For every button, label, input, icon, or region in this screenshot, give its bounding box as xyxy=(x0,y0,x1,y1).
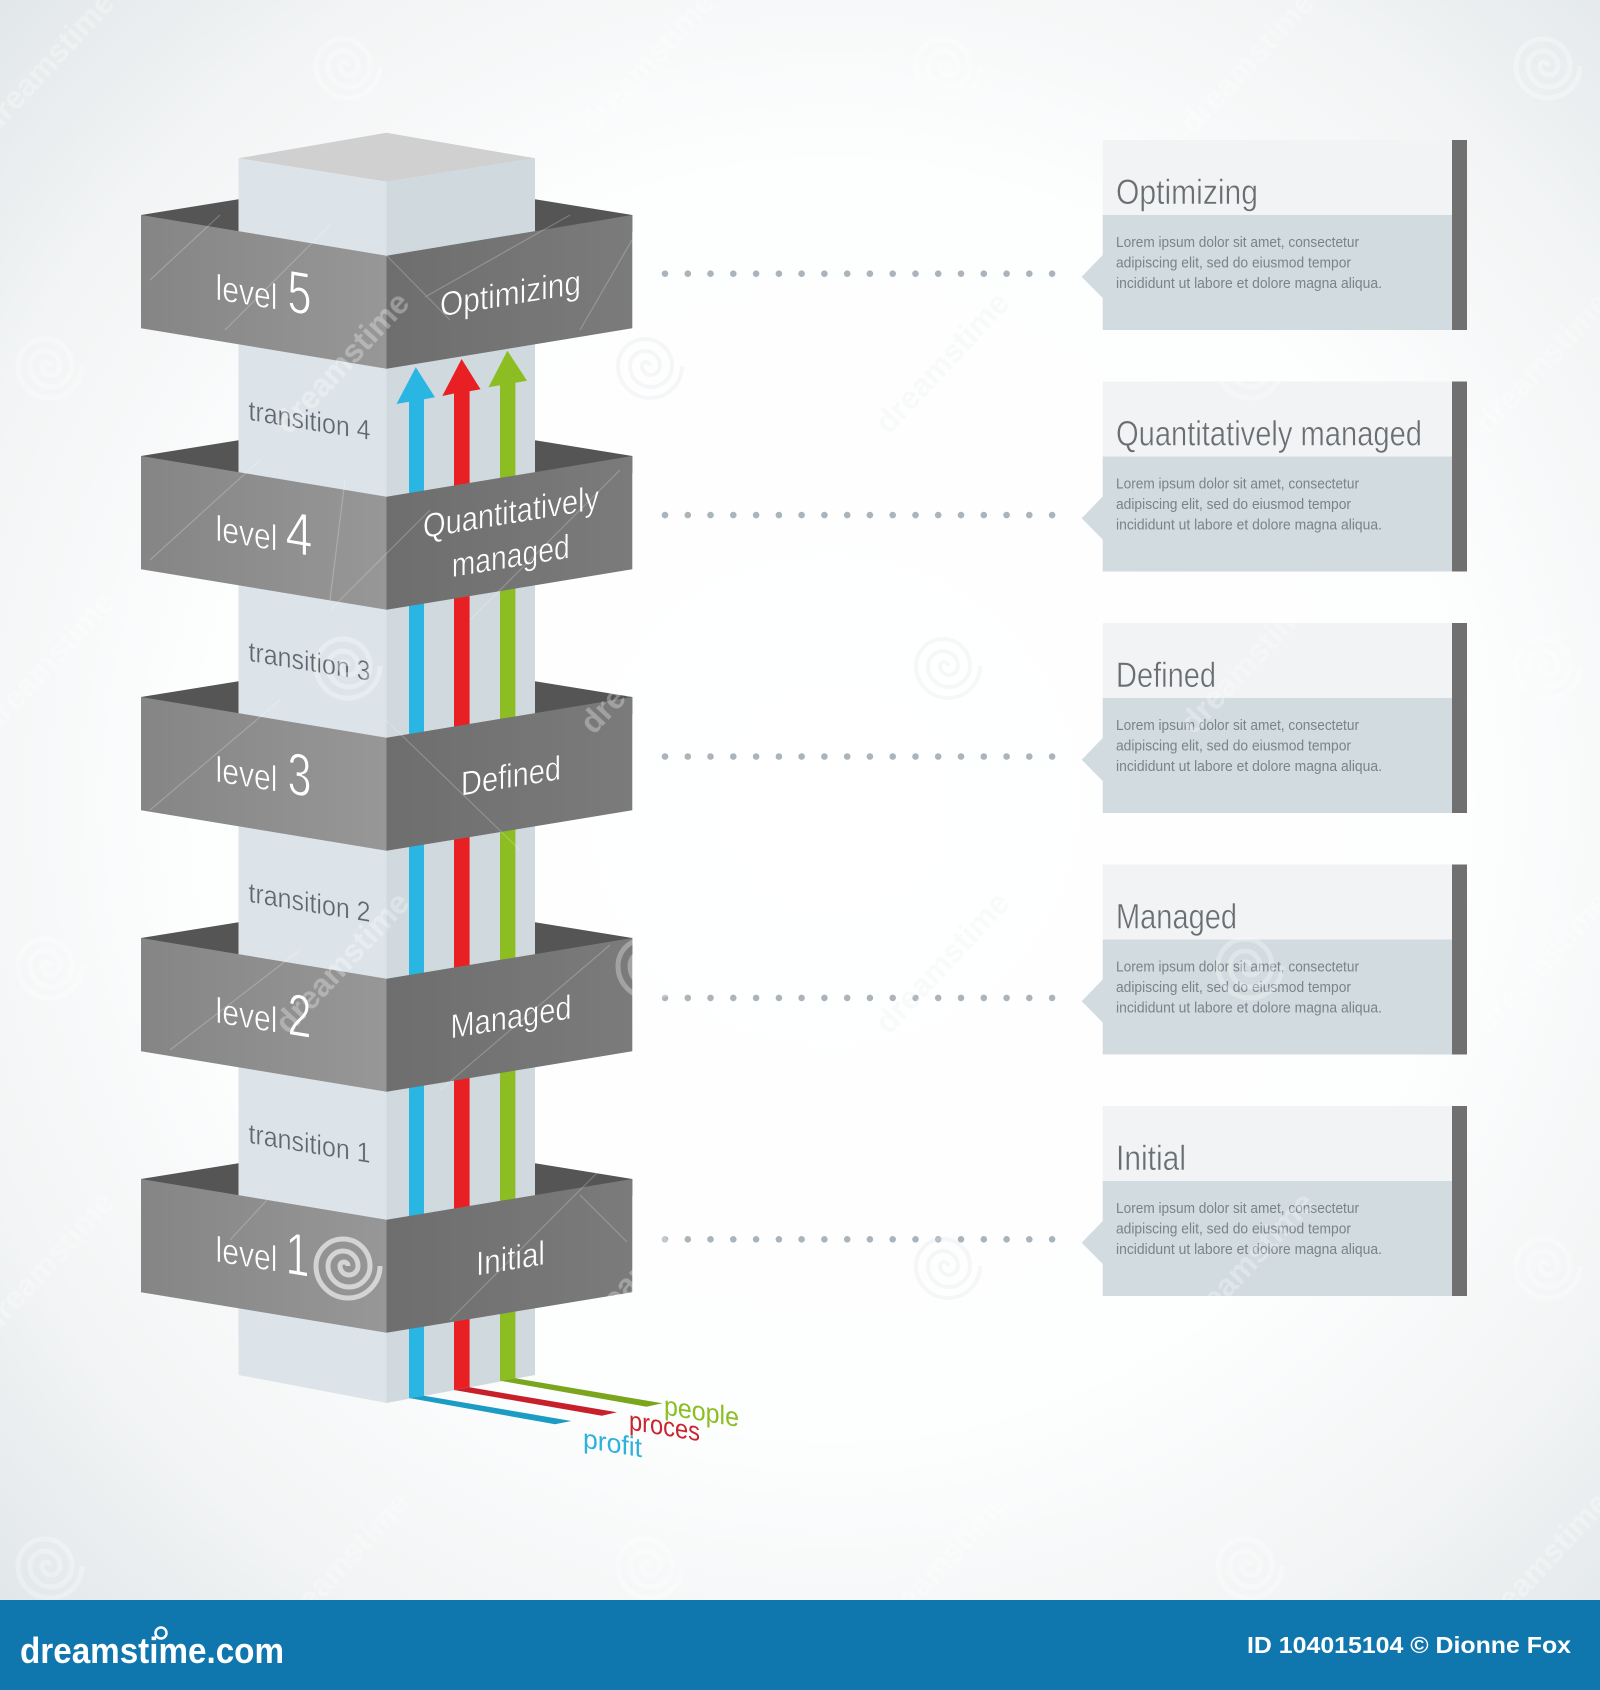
card: Optimizing xyxy=(1082,140,1467,330)
watermark text: dreamstime xyxy=(868,885,1016,1040)
card: Quantitatively managed: incididunt ut labore et dolore magna aliqua. xyxy=(1116,516,1382,534)
footer logo spiral xyxy=(156,1628,166,1638)
card: Managed: adipiscing elit, sed do eiusmod tempor xyxy=(1116,979,1351,996)
card: Initial: Lorem ipsum dolor sit amet, consectetur xyxy=(1116,1200,1359,1217)
arrow: process xyxy=(442,359,480,1390)
band: level 1 Initial: Initial xyxy=(476,1234,545,1284)
legend: profit: profit xyxy=(583,1423,642,1463)
card: Managed: Managed xyxy=(1116,898,1237,936)
watermark text: dreamstime xyxy=(268,885,416,1040)
watermark text: dreamstime xyxy=(268,1485,416,1640)
card: Quantitatively managed: Lorem ipsum dolor sit amet, consectetur xyxy=(1116,476,1359,492)
card: Quantitatively managed: Quantitatively managed xyxy=(1116,414,1422,454)
band: level 2 Managed: 2 xyxy=(288,980,312,1051)
card: Managed xyxy=(1082,864,1467,1054)
watermark lines xyxy=(150,215,632,1320)
band: level 5 Optimizing: Optimizing xyxy=(440,264,581,325)
band: level 2 Managed: Managed xyxy=(450,989,572,1046)
connector: level 4 xyxy=(662,512,1055,518)
band: level 1 Initial xyxy=(141,1179,632,1333)
watermark text: dreamstime xyxy=(573,1185,721,1340)
card: Defined xyxy=(1082,623,1467,813)
transition 2 label: transition 2 xyxy=(248,876,370,928)
card: Optimizing: incididunt ut labore et dolore magna aliqua. xyxy=(1116,275,1382,292)
legend: people: people xyxy=(664,1390,739,1433)
watermark text: dreamstime xyxy=(1173,1185,1321,1340)
connector: level 1 xyxy=(662,1236,1055,1243)
watermark text: dreamstime xyxy=(868,285,1016,440)
connector: level 3 xyxy=(662,753,1055,760)
band: level 5 Optimizing: 5 xyxy=(288,257,312,328)
footer logo: dreamstime.com xyxy=(20,1630,284,1671)
connector: level 2 xyxy=(662,995,1055,1001)
card: Quantitatively managed: adipiscing elit, sed do eiusmod tempor xyxy=(1116,496,1351,513)
band: level 2 Managed xyxy=(141,938,632,1092)
tower band backs xyxy=(141,199,632,1196)
band: level 2 Managed: level xyxy=(216,990,278,1041)
watermark text: dreamstime xyxy=(1173,585,1321,740)
band: level 3 Defined xyxy=(141,697,632,851)
transition 4 label: transition 4 xyxy=(248,394,370,446)
watermark text: dreamstime xyxy=(868,1485,1016,1640)
card: Defined: Defined xyxy=(1116,656,1216,695)
footer credit: ID 104015104 © Dionne Fox xyxy=(1247,1632,1571,1658)
arrow: people xyxy=(488,351,527,1381)
band: level 4 Quantitatively managed xyxy=(141,456,632,610)
transition 3 label: transition 3 xyxy=(248,635,370,687)
band: level 4 Quantitatively managed: managed xyxy=(452,528,570,585)
column xyxy=(238,133,535,1403)
band: level 4 Quantitatively managed: 4 xyxy=(286,497,312,569)
band: level 4 Quantitatively managed: Quantitatively xyxy=(423,479,600,546)
footer bar xyxy=(0,1600,1600,1690)
watermark text: dreamstime xyxy=(268,285,416,440)
transition 1 label: transition 1 xyxy=(248,1117,370,1169)
card: Optimizing: Lorem ipsum dolor sit amet, consectetur xyxy=(1116,234,1359,251)
card: Initial: Initial xyxy=(1116,1139,1186,1178)
band: level 5 Optimizing: level xyxy=(216,267,278,318)
card: Managed: Lorem ipsum dolor sit amet, consectetur xyxy=(1116,958,1359,976)
card: Initial: adipiscing elit, sed do eiusmod tempor xyxy=(1116,1220,1351,1238)
card: Defined: adipiscing elit, sed do eiusmod tempor xyxy=(1116,738,1351,754)
band: level 3 Defined: 3 xyxy=(288,739,312,810)
card: Defined: Lorem ipsum dolor sit amet, consectetur xyxy=(1116,717,1359,734)
band: level 1 Initial: 1 xyxy=(286,1218,310,1290)
card: Managed: incididunt ut labore et dolore magna aliqua. xyxy=(1116,1000,1382,1016)
card: Initial: incididunt ut labore et dolore magna aliqua. xyxy=(1116,1241,1382,1258)
legend: proces: proces xyxy=(629,1405,700,1447)
floor strips xyxy=(409,1378,662,1424)
band: level 3 Defined: level xyxy=(216,749,278,800)
band: level 1 Initial: level xyxy=(216,1229,278,1280)
connector: level 5 xyxy=(662,270,1055,277)
card: Defined: incididunt ut labore et dolore magna aliqua. xyxy=(1116,758,1382,775)
band: level 3 Defined: Defined xyxy=(461,749,561,804)
band: level 4 Quantitatively managed: level xyxy=(216,508,278,559)
card: Optimizing: Optimizing xyxy=(1116,173,1258,212)
watermark text: dreamstime xyxy=(573,585,721,740)
card: Quantitatively managed xyxy=(1082,382,1467,572)
card: Optimizing: adipiscing elit, sed do eiusmod tempor xyxy=(1116,254,1351,272)
band: level 5 Optimizing xyxy=(141,215,632,369)
card: Initial xyxy=(1082,1106,1467,1296)
arrow: profit xyxy=(396,367,435,1398)
